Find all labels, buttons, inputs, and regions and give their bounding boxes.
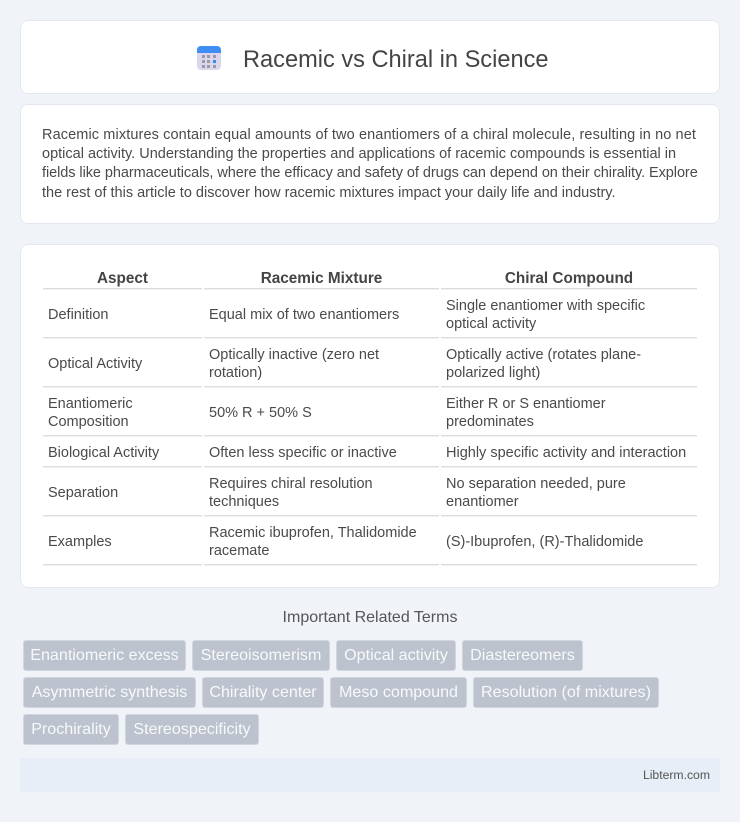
row: definition: optical activity [446, 316, 536, 332]
column headings: Chiral Compound [505, 270, 633, 287]
row: separation: Requires chiral resolution [209, 476, 373, 492]
row: optical activity: polarized light) [446, 365, 540, 381]
row: definition: Definition [48, 307, 108, 323]
text block: introduction: the rest of this article to discover how racemic mixtures impact your daily life and industry. [42, 185, 616, 201]
panel: introduction [20, 104, 720, 224]
tag: Resolution (of mixtures) [481, 683, 651, 701]
row: examples: (S)-Ibuprofen, (R)-Thalidomide [446, 534, 643, 550]
row: enantiomeric composition [48, 396, 606, 430]
tag: Chirality center [209, 683, 317, 701]
text block: introduction: fields like pharmaceuticals, where the efficacy and safety of drugs can depend on their chirality. Explore [42, 165, 698, 181]
row: separation: enantiomer [446, 494, 519, 510]
tag: Meso compound [339, 683, 458, 701]
text block: introduction: optical activity. Understanding the properties and applications of racemic compounds is essential in [42, 146, 676, 162]
row: enantiomeric composition: 50% R + 50% S [209, 405, 312, 421]
table: racemic vs chiral comparison [43, 270, 697, 566]
heading: important related terms: Important Related Terms [283, 609, 457, 626]
column headings: Racemic Mixture [261, 270, 382, 287]
tag [336, 640, 456, 671]
tag [192, 640, 330, 671]
row: examples [48, 525, 643, 559]
text block: introduction [42, 127, 698, 201]
row: examples: Racemic ibuprofen, Thalidomide [209, 525, 417, 541]
tag: Optical activity [344, 646, 448, 664]
row: examples: Examples [48, 534, 112, 550]
row: biological activity: Biological Activity [48, 445, 159, 461]
panel: comparison table [20, 244, 720, 588]
tag [462, 640, 583, 671]
row: enantiomeric composition: Either R or S enantiomer [446, 396, 606, 412]
row: examples: racemate [209, 543, 269, 559]
row: biological activity: Often less specific or inactive [209, 445, 397, 461]
row: enantiomeric composition: Composition [48, 414, 129, 430]
row: definition: Single enantiomer with specific [446, 298, 645, 314]
row: biological activity [48, 445, 686, 461]
row: biological activity: Highly specific activity and interaction [446, 445, 686, 461]
row: separation: techniques [209, 494, 279, 510]
tag [23, 677, 196, 708]
tag group: related terms [23, 640, 659, 745]
text block: introduction: Racemic mixtures contain equal amounts of two enantiomers of a chiral molecule, resulting in no net [42, 127, 696, 143]
tag [23, 640, 186, 671]
row: optical activity: rotation) [209, 365, 262, 381]
column headings: Aspect [97, 270, 148, 287]
tag: Enantiomeric excess [30, 646, 179, 664]
footer credit: Libterm.com [643, 768, 710, 782]
tag [330, 677, 467, 708]
icon: calendar grid [197, 46, 221, 70]
row: separation: Separation [48, 485, 118, 501]
row: optical activity: Optically active (rotates plane- [446, 347, 641, 363]
tag [202, 677, 324, 708]
tag [473, 677, 659, 708]
footer [20, 758, 720, 792]
row: optical activity: Optically inactive (zero net [209, 347, 379, 363]
row: optical activity: Optical Activity [48, 356, 142, 372]
row: enantiomeric composition: predominates [446, 414, 534, 430]
tag [23, 714, 119, 745]
tag: Prochirality [31, 720, 111, 738]
column headings [97, 270, 633, 287]
title: Racemic vs Chiral in Science [243, 47, 549, 73]
row: enantiomeric composition: Enantiomeric [48, 396, 133, 412]
tag: Diastereomers [470, 646, 575, 664]
tag: Stereoisomerism [201, 646, 321, 664]
row: definition [48, 298, 645, 332]
panel: header [20, 20, 720, 94]
row: separation [48, 476, 626, 510]
tag [125, 714, 259, 745]
row: optical activity [48, 347, 641, 381]
row: separation: No separation needed, pure [446, 476, 626, 492]
row: definition: Equal mix of two enantiomers [209, 307, 399, 323]
tag: Asymmetric synthesis [32, 683, 187, 701]
tag: Stereospecificity [133, 720, 251, 738]
